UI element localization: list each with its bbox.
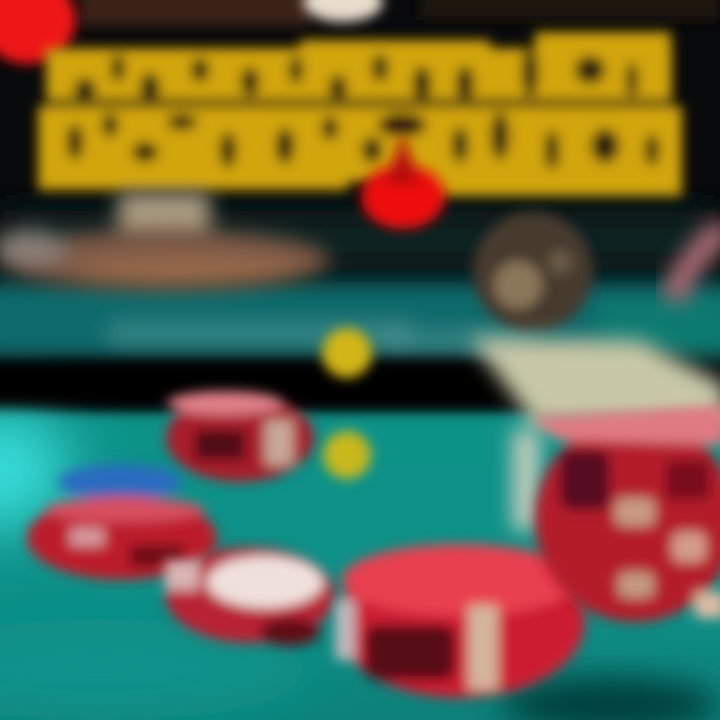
brown tray <box>0 230 330 290</box>
chip stack: large right <box>530 405 720 622</box>
white light top <box>303 0 383 22</box>
title: blurred yellow lettering <box>38 32 682 196</box>
table: lower felt <box>0 412 720 720</box>
pink curved object at right <box>672 228 720 300</box>
chip stack: blue and red left <box>27 464 217 580</box>
table: upper felt <box>0 282 720 358</box>
title: yellow mass <box>38 32 682 196</box>
chip stack: large front <box>335 544 585 698</box>
round coin at back <box>473 212 593 332</box>
title: dark gaps between letters <box>46 46 672 170</box>
red spade emblem <box>361 135 445 229</box>
red corner circle <box>0 0 76 64</box>
chip stack: white middle <box>165 547 335 646</box>
chip stack: middle <box>166 391 314 482</box>
felt glow <box>0 410 720 720</box>
yellow balls <box>322 328 372 479</box>
stack of cards at right <box>470 338 720 530</box>
cream cup on left <box>118 192 210 242</box>
black rail <box>0 362 525 404</box>
